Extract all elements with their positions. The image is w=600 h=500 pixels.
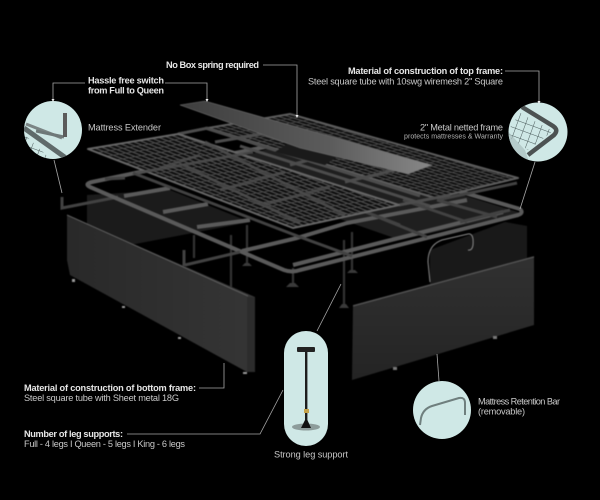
leader: hassle free left bbox=[53, 83, 85, 100]
callout circle: metal netted frame bbox=[508, 102, 568, 162]
leader: retention bar bbox=[437, 354, 439, 381]
label: hassle free switch bbox=[88, 76, 164, 96]
label: bottom frame material: Material of construction of bottom frame: bbox=[24, 383, 196, 393]
callout circle: mattress extender bbox=[24, 101, 82, 159]
leader: bottom frame material bbox=[199, 363, 224, 388]
front wire mesh frame bbox=[88, 134, 399, 228]
leg posts bbox=[194, 225, 358, 308]
left back panel bbox=[87, 190, 250, 245]
label: top frame material: Steel square tube with 10swg wiremesh 2" Square bbox=[308, 76, 503, 86]
leader: netted frame to bed bbox=[520, 162, 535, 209]
right back panel bbox=[430, 222, 527, 290]
leader: pill to leg bbox=[317, 284, 341, 331]
label: top frame material: Material of construction of top frame: bbox=[348, 66, 503, 76]
label: bottom frame material: Steel square tube with Sheet metal 18G bbox=[24, 393, 179, 403]
label: mattress retention bar: Mattress Retention Bar bbox=[478, 396, 560, 406]
label: metal netted frame: protects mattresses & Warranty bbox=[404, 134, 504, 140]
label: metal netted frame bbox=[404, 122, 504, 140]
left side panel bbox=[67, 215, 255, 374]
lower bed frame bbox=[62, 142, 522, 272]
label: mattress retention bar bbox=[478, 396, 560, 416]
no box spring plank bbox=[180, 101, 432, 174]
label: number of leg supports: Full - 4 legs I Queen - 5 legs I King - 6 legs bbox=[24, 439, 185, 449]
label: no box spring: No Box spring required bbox=[166, 60, 259, 70]
retention bar cable bbox=[428, 234, 473, 282]
right side panel bbox=[352, 256, 534, 380]
label: bottom frame material bbox=[24, 383, 196, 403]
middle frame bars bridging both meshes bbox=[178, 128, 450, 206]
leader: extender to bar bbox=[54, 160, 62, 193]
leader: leg supports bbox=[127, 390, 283, 434]
label: metal netted frame: 2" Metal netted frame bbox=[420, 122, 503, 132]
leader end markers bbox=[52, 99, 540, 118]
leader: top frame material bbox=[505, 71, 539, 102]
label: mattress extender: Mattress Extender bbox=[88, 122, 161, 132]
callout circle: retention bar bbox=[413, 381, 471, 439]
label: top frame material bbox=[308, 66, 503, 86]
exploded bed frame illustration bbox=[62, 101, 534, 380]
back wire mesh frame bbox=[208, 114, 518, 198]
leader: no box spring bbox=[263, 65, 297, 116]
under-frame dark fill bbox=[200, 142, 521, 240]
label: hassle free switch: Hassle free switch bbox=[88, 76, 164, 86]
label: strong leg support: Strong leg support bbox=[274, 450, 348, 460]
frame bars crossing the front mesh bbox=[137, 142, 345, 223]
label: number of leg supports: Number of leg supports: bbox=[24, 429, 123, 439]
label: number of leg supports bbox=[24, 429, 185, 449]
leader: hassle free right bbox=[165, 83, 207, 100]
callout pill: strong leg support bbox=[284, 331, 328, 446]
label: hassle free switch: from Full to Queen bbox=[88, 86, 164, 96]
label: mattress retention bar: (removable) bbox=[478, 406, 525, 416]
